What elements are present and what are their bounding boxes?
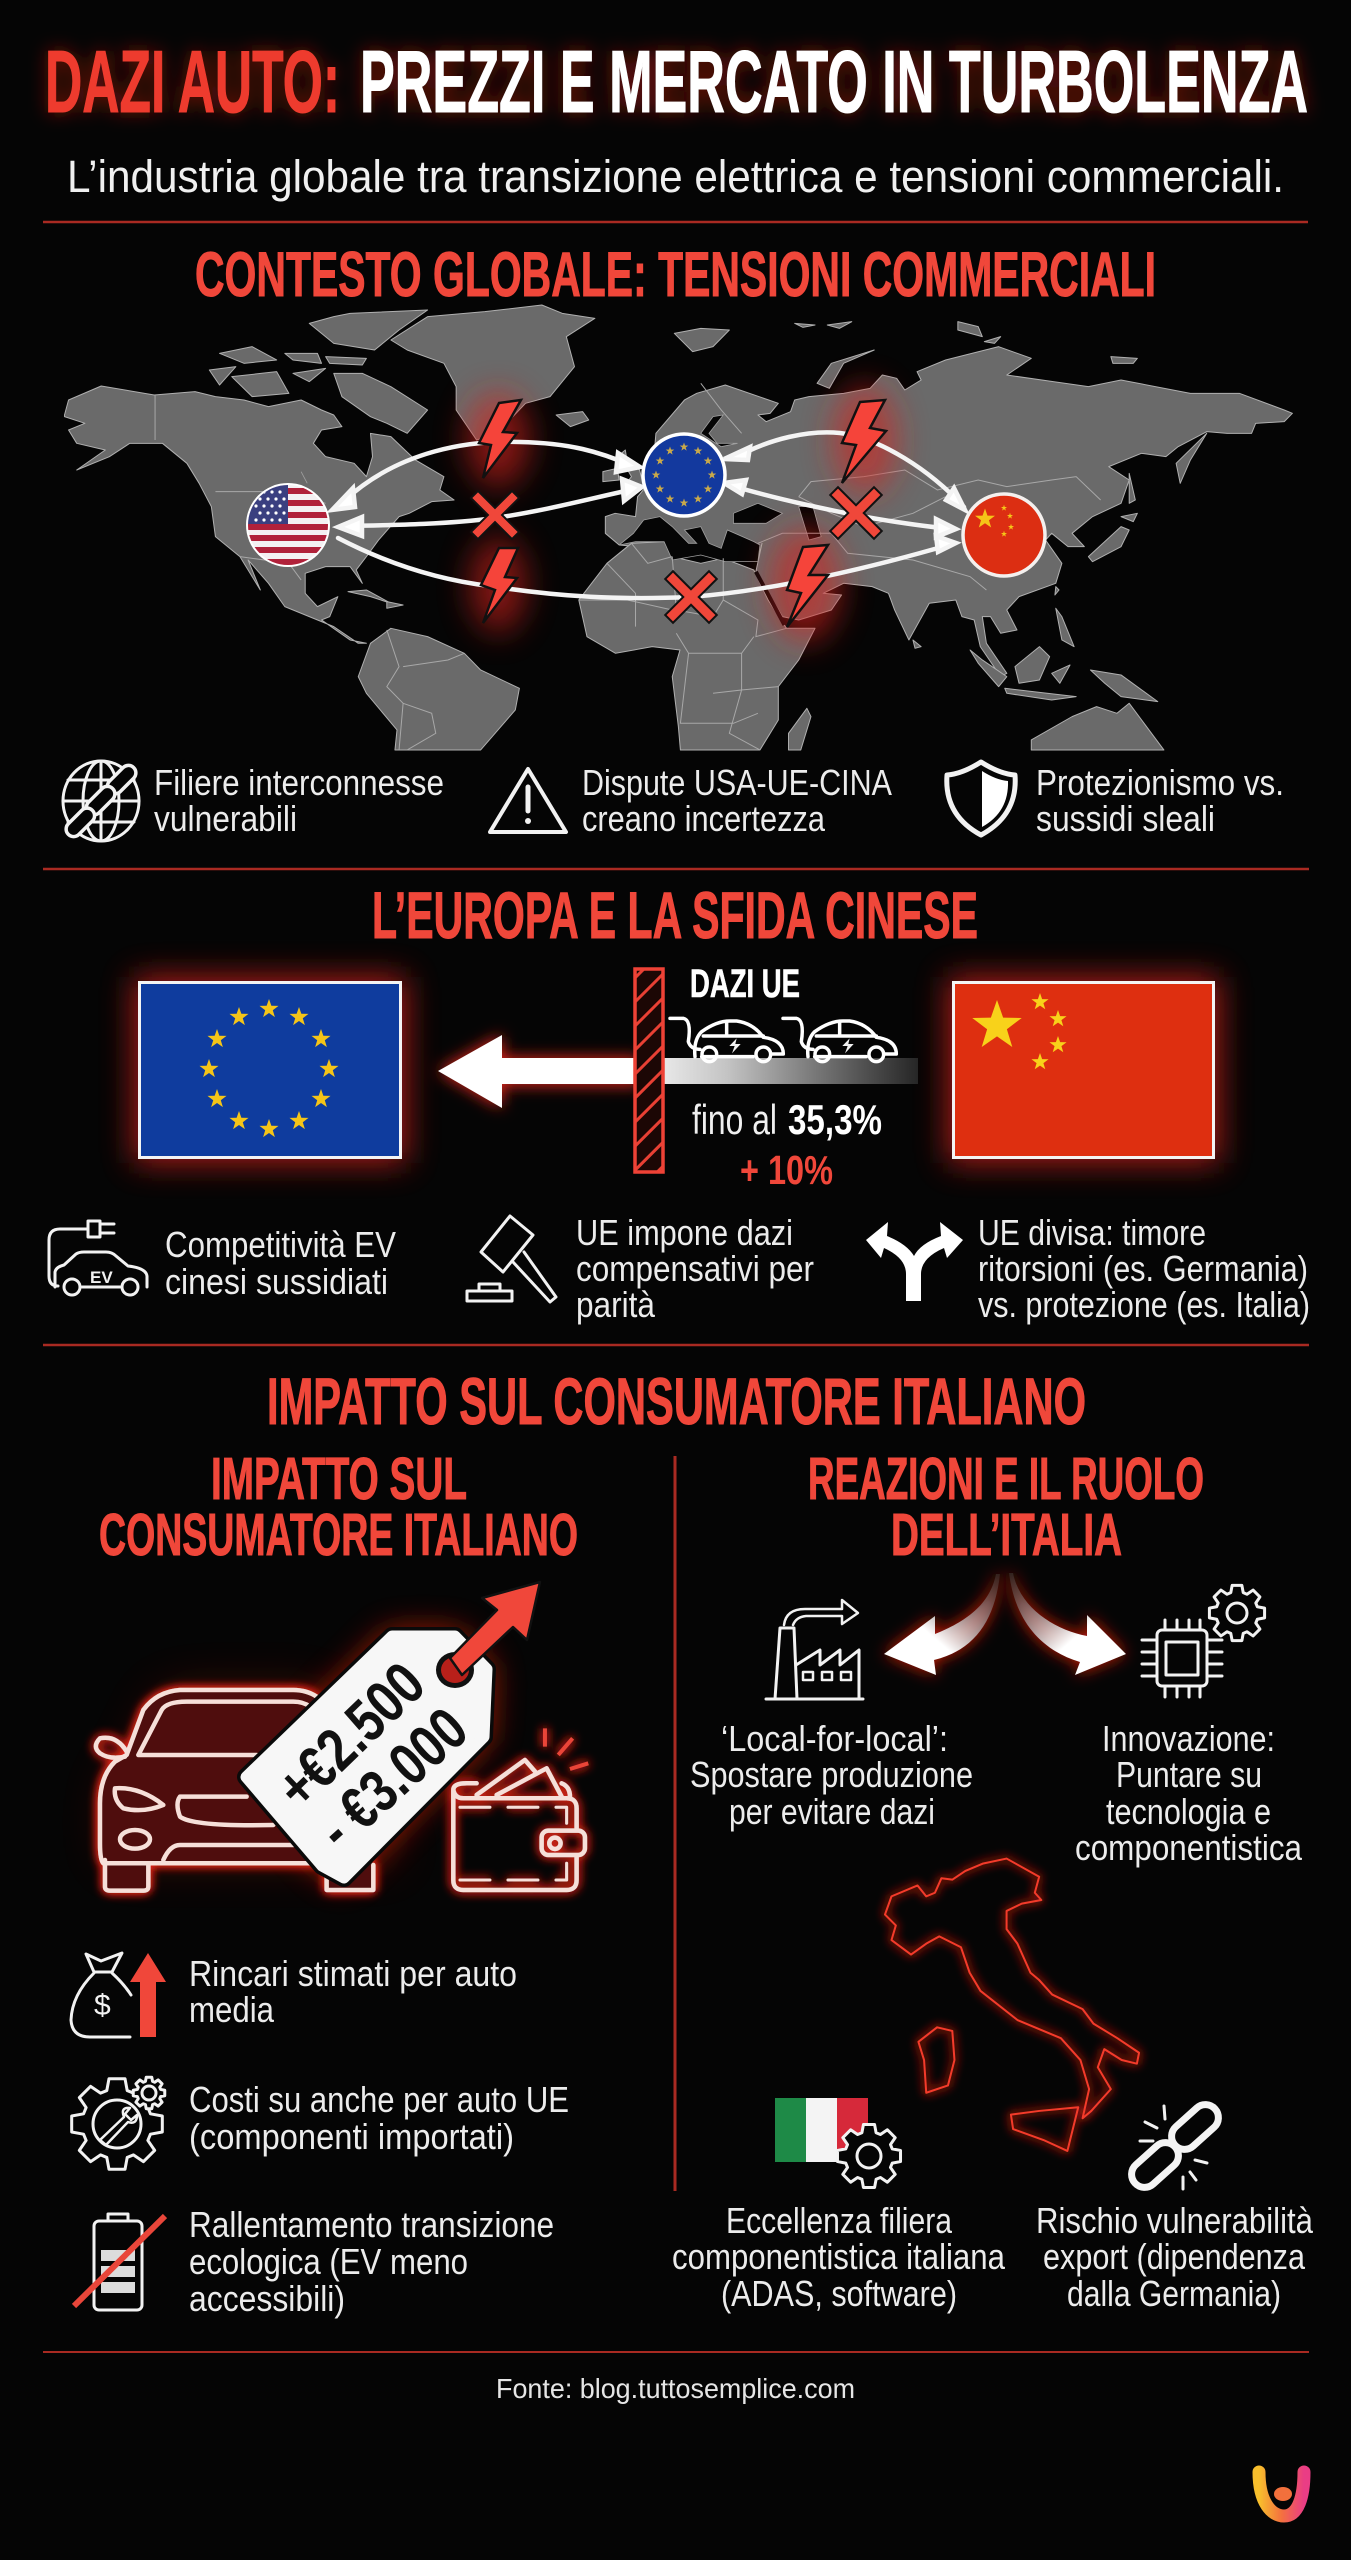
heading: reazioni — [808, 1446, 1204, 1568]
text: dazi compensativi: compensativi per — [576, 1248, 814, 1289]
text: costi: (componenti importati) — [189, 2116, 514, 2157]
icon: factory — [766, 1600, 863, 1699]
text: rincari: media — [189, 1989, 275, 2030]
figure: +10%: + 10% — [740, 1147, 833, 1193]
text: ue divisa: UE divisa: timore — [978, 1212, 1206, 1253]
icon: money bag and up arrow: $ — [94, 1989, 111, 2022]
text: local for local — [690, 1718, 973, 1832]
text: competitività: Competitività EV — [165, 1224, 396, 1265]
flag: China large — [948, 977, 1219, 1163]
panel: tariff diagram — [134, 962, 1219, 1193]
figure: fino al 35,3%: 35,3% — [788, 1096, 882, 1143]
icons: lightning bolts — [479, 400, 886, 627]
map: Italy outline — [885, 1859, 1139, 2151]
panel: world map — [64, 305, 1292, 750]
text: competitività — [165, 1224, 396, 1302]
text: local for local: ‘Local-for-local’: — [721, 1718, 948, 1759]
icons: electric cars — [670, 1018, 896, 1062]
text: dazi compensativi: UE impone dazi — [576, 1212, 793, 1253]
icon: battery crossed out — [74, 2214, 165, 2310]
flag: EU — [643, 434, 725, 516]
subtitle: L’industria globale tra transizione elettrica e tensioni commerciali. — [67, 151, 1284, 202]
text: rischio — [1036, 2200, 1314, 2314]
text: dispute: creano incertezza — [582, 798, 826, 839]
icon: globe with chain — [63, 761, 139, 841]
text: eccellenza: Eccellenza filiera — [726, 2200, 953, 2241]
panel: context points — [63, 761, 1284, 841]
map: tension glows — [466, 385, 897, 643]
text: eccellenza — [672, 2200, 1006, 2314]
icon: chip and gear — [1142, 1585, 1265, 1697]
text: innovazione: tecnologia e — [1106, 1791, 1271, 1832]
heading: impatto sul consumatore italiano — [99, 1446, 578, 1568]
icon: fork arrows — [866, 1222, 963, 1301]
map: eurasia, africa and oceania — [579, 322, 1292, 750]
text: filiere — [154, 762, 444, 839]
flag: China — [963, 494, 1045, 576]
icon: warning triangle — [490, 769, 566, 832]
text: dispute — [582, 762, 892, 839]
icon: gears and wrench — [72, 2077, 165, 2169]
heading: impatto sul consumatore italiano: IMPATTO SUL — [211, 1446, 467, 1512]
text: competitività: cinesi sussidiati — [165, 1261, 388, 1302]
text: rallentamento: accessibili) — [189, 2278, 345, 2319]
text: costi — [189, 2079, 569, 2157]
icon: wallet — [453, 1728, 588, 1890]
icons: red crosses — [478, 495, 874, 615]
arrows: USA to EU to China — [332, 432, 965, 598]
icon: EV car with plug: EV — [90, 1268, 113, 1287]
text: rincari: Rincari stimati per auto — [189, 1953, 517, 1994]
barrier — [635, 969, 663, 1172]
text: local for local: Spostare produzione — [690, 1754, 973, 1795]
text: local for local: per evitare dazi — [729, 1791, 935, 1832]
text: ue divisa — [978, 1212, 1310, 1325]
arrow: exports blocked towards EU — [438, 1035, 918, 1108]
flag: EU large — [134, 977, 406, 1163]
arrow: price rising — [436, 1582, 540, 1688]
text: innovazione: Puntare su — [1116, 1754, 1262, 1795]
icon: money bag and up arrow — [71, 1953, 166, 2037]
icon: EV car with plug — [49, 1221, 147, 1295]
text: dazi compensativi — [576, 1212, 814, 1325]
text: rincari — [189, 1953, 517, 2030]
label: dazi ue: DAZI UE — [690, 962, 800, 1006]
heading: reazioni: DELL’ITALIA — [891, 1502, 1122, 1568]
panel: impatto sul consumatore — [71, 1446, 588, 2319]
text: innovazione: componentistica — [1075, 1827, 1303, 1868]
text: costi: Costi su anche per auto UE — [189, 2079, 569, 2120]
panel: europe points — [49, 1212, 1310, 1325]
source: Fonte: blog.tuttosemplice.com — [496, 2373, 855, 2404]
price tag — [246, 1636, 487, 1878]
panel: reazioni e ruolo dell'italia — [672, 1446, 1314, 2314]
text: protezionismo: Protezionismo vs. — [1036, 762, 1284, 803]
arrows: two strategies — [884, 1573, 1126, 1675]
text: rischio: dalla Germania) — [1067, 2273, 1281, 2314]
title: DAZI AUTO: — [45, 32, 340, 131]
icon: gavel — [467, 1216, 556, 1302]
flag: USA — [246, 483, 330, 567]
logo — [1259, 2472, 1304, 2516]
text: innovazione — [1075, 1718, 1303, 1868]
text: dispute: Dispute USA-UE-CINA — [582, 762, 892, 803]
text: rischio: Rischio vulnerabilità — [1036, 2200, 1314, 2241]
figure: price increase — [263, 1649, 480, 1862]
text: rallentamento — [189, 2204, 554, 2319]
heading: impatto sul consumatore italiano: CONSUMATORE ITALIANO — [99, 1502, 578, 1568]
text: dazi compensativi: parità — [576, 1284, 656, 1325]
text: filiere: vulnerabili — [154, 798, 297, 839]
text: eccellenza: componentistica italiana — [672, 2236, 1006, 2277]
text: protezionismo — [1036, 762, 1284, 839]
figure: fino al 35,3% — [692, 1096, 882, 1143]
icon: Italian flag and gear — [775, 2098, 901, 2188]
icon: car front — [96, 1690, 373, 1891]
text: rallentamento: ecologica (EV meno — [189, 2241, 468, 2282]
map: americas and greenland — [64, 305, 595, 750]
figure: fino al 35,3%: fino al — [692, 1096, 777, 1143]
icon: shield — [947, 762, 1015, 835]
icon: broken chain — [1126, 2099, 1224, 2193]
text: rischio: export (dipendenza — [1043, 2236, 1306, 2277]
figure: price increase: - €3.000 — [305, 1695, 480, 1862]
text: protezionismo: sussidi sleali — [1036, 798, 1215, 839]
figure: price increase: +€2.500 — [263, 1649, 438, 1821]
illustration: car, wallet and price tag — [96, 1582, 588, 1891]
heading: europa e cina: L’EUROPA E LA SFIDA CINESE — [372, 878, 978, 952]
text: filiere: Filiere interconnesse — [154, 762, 444, 803]
text: eccellenza: (ADAS, software) — [721, 2273, 957, 2314]
text: innovazione: Innovazione: — [1102, 1718, 1275, 1759]
text: rallentamento: Rallentamento transizione — [189, 2204, 554, 2245]
